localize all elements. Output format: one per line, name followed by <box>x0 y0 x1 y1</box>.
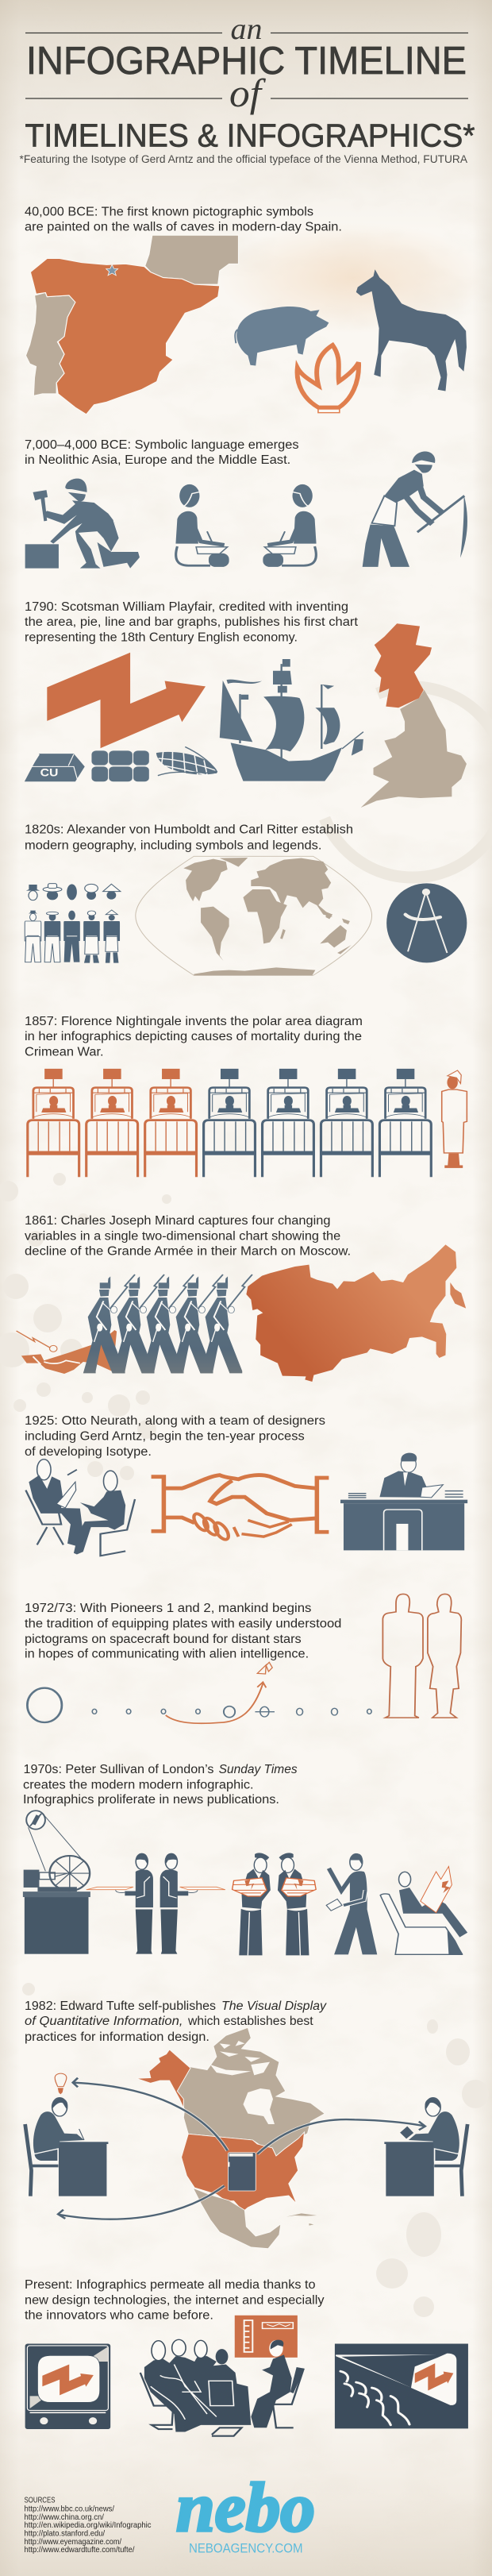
icon: reader at desk <box>384 2098 467 2196</box>
map: North America <box>136 2027 325 2249</box>
icon: wool bale <box>91 750 149 781</box>
icon: light bulb <box>55 2073 67 2094</box>
subtitle: *Featuring the Isotype of Gerd Arntz and the official typeface of the Vienna Method, FUTURA <box>19 153 467 165</box>
icon: printing press <box>23 1811 90 1954</box>
icon: flame <box>298 345 359 413</box>
text: 1790: 1790: Scotsman William Playfair, credited with inventing <box>25 600 348 614</box>
icon: reader in armchair <box>380 1866 467 1954</box>
icon: copper ingot: CU <box>40 768 58 779</box>
arrow: Pioneer trajectory <box>166 1682 266 1723</box>
text: 1861: 1861: Charles Joseph Minard captures four changing <box>25 1214 331 1228</box>
sources: http://www.china.org.cn/ <box>24 2512 104 2522</box>
icon: reaper <box>363 451 467 567</box>
neolithic figures <box>25 451 467 569</box>
hospital beds <box>28 1069 467 1177</box>
icon: television <box>25 2344 110 2429</box>
text: 1970s: Infographics proliferate in news publications. <box>23 1793 279 1807</box>
icon: standing man with note <box>326 1853 377 1954</box>
text: 1970s <box>23 1763 298 1807</box>
icon: marching soldiers <box>83 1275 252 1373</box>
title <box>25 13 475 154</box>
icon: sun and planets <box>27 1688 371 1722</box>
text: 1820s <box>25 823 353 852</box>
text: 1982: which establishes best <box>187 2015 313 2028</box>
icon: paper carriers <box>233 1853 316 1955</box>
icon: projector screening <box>335 2344 468 2428</box>
icon: pig <box>235 307 329 365</box>
text: 40,000 BCE: 40,000 BCE: The first known pictographic symbols <box>25 205 313 218</box>
text: 1861 <box>25 1214 351 1259</box>
40,000 BCE illustrations <box>25 235 467 415</box>
icon: copper ingot <box>25 754 85 781</box>
icon: press workers <box>116 1853 198 1954</box>
sources: http://en.wikipedia.org/wiki/Infographic <box>24 2520 151 2530</box>
text: 1857: in her infographics depicting causes of mortality during the <box>25 1030 362 1043</box>
1861 illustrations <box>17 1244 466 1382</box>
icon: spacecraft <box>257 1662 272 1674</box>
text: 1925: including Gerd Arntz, begin the ten-year process <box>25 1429 305 1444</box>
icon: compass <box>386 883 467 962</box>
text: Present: the innovators who came before. <box>25 2309 213 2323</box>
figure: man <box>382 1594 423 1718</box>
text: 1790 <box>25 600 359 645</box>
text: 1972/73: pictograms on spacecraft bound for distant stars <box>25 1633 302 1646</box>
icon: scribes <box>175 484 317 567</box>
text: 1972/73: in hopes of communicating with alien intelligence. <box>25 1648 309 1661</box>
text: 1970s: 1970s: Peter Sullivan of London’s <box>24 1763 214 1776</box>
text: 1982: of Quantitative Information, <box>25 2015 183 2028</box>
text: 1925 <box>25 1414 325 1459</box>
Pioneer plaque human figures <box>382 1594 461 1718</box>
map: world <box>136 856 372 975</box>
map: Russia <box>246 1244 466 1382</box>
text: 1925: 1925: Otto Neurath, along with a team of designers <box>25 1414 325 1428</box>
text: 1790: representing the 18th Century English economy. <box>25 631 298 645</box>
text: 1861: decline of the Grande Armée in their March on Moscow. <box>25 1245 351 1259</box>
Present illustrations <box>25 2316 468 2436</box>
1970s illustrations <box>23 1811 467 1955</box>
icon: fallen soldier <box>17 1330 117 1374</box>
sources: http://plato.stanford.edu/ <box>24 2529 105 2539</box>
text: 1861: variables in a single two-dimensional chart showing the <box>25 1229 340 1244</box>
text: 1790: the area, pie, line and bar graphs, publishes his first chart <box>25 615 359 629</box>
icon: writer at desk <box>25 2098 108 2196</box>
1925 illustrations <box>25 1453 467 1556</box>
arrows from book <box>58 2078 425 2219</box>
title: TIMELINES & INFOGRAPHICS* <box>25 118 475 154</box>
title: of <box>229 71 266 115</box>
icon: horse <box>356 269 467 391</box>
icon: handshake <box>152 1475 329 1541</box>
text: 1970s: Sunday Times <box>219 1763 298 1776</box>
icon: meeting around chart <box>140 2316 305 2436</box>
text: 40,000 BCE <box>25 205 342 233</box>
text: 1982: 1982: Edward Tufte self-publishes <box>25 1999 216 2013</box>
legend: hats and people <box>25 884 121 963</box>
text: 1857: 1857: Florence Nightingale invents the polar area diagram <box>25 1015 363 1028</box>
icon: ship <box>220 659 363 781</box>
text: Present: Present: Infographics permeate all media thanks to <box>25 2278 316 2292</box>
logo: nebo: nebo <box>176 2470 315 2547</box>
text: 7,000-4,000 BCE <box>25 438 299 467</box>
map: United Kingdom <box>361 623 467 808</box>
text: 1970s: creates the modern modern infographic. <box>23 1778 254 1791</box>
text: 1925: of developing Isotype. <box>25 1445 152 1459</box>
icon: man at desk <box>340 1453 467 1550</box>
text: 1982: The Visual Display <box>221 1999 327 2013</box>
text: Present: new design technologies, the internet and especially <box>25 2293 325 2308</box>
icon: nurse <box>442 1070 467 1168</box>
beds: orange <box>28 1069 197 1177</box>
sources: SOURCES <box>24 2496 56 2505</box>
beds: blue <box>204 1069 431 1177</box>
text: 1857 <box>25 1015 363 1059</box>
sources: http://www.bbc.co.uk/news/ <box>24 2504 114 2513</box>
figure: woman <box>428 1594 461 1718</box>
sources: http://www.edwardtufte.com/tufte/ <box>24 2545 135 2555</box>
title: an <box>230 13 262 46</box>
text: 1982 <box>25 1999 327 2044</box>
text: 1972/73 <box>25 1602 341 1661</box>
text: 1820s: modern geography, including symbols and legends. <box>25 839 321 852</box>
1982 illustrations <box>25 2027 467 2249</box>
text: 1820s: 1820s: Alexander von Humboldt and Carl Ritter establish <box>25 823 353 837</box>
sources: http://www.eyemagazine.com/ <box>24 2537 121 2547</box>
map: Iberia and France <box>25 235 239 415</box>
chart: Playfair zigzag arrow <box>47 653 206 748</box>
logo url: NEBOAGENCY.COM <box>189 2541 303 2555</box>
1820s illustrations <box>25 856 467 975</box>
1790 illustrations <box>25 623 467 808</box>
icon: seated men <box>25 1460 135 1556</box>
sources <box>24 2496 151 2555</box>
text: 1857: Crimean War. <box>25 1046 104 1059</box>
title: INFOGRAPHIC TIMELINE <box>26 40 467 83</box>
text: 1972/73: 1972/73: With Pioneers 1 and 2, mankind begins <box>25 1602 312 1615</box>
text: Present <box>25 2278 325 2323</box>
text: 40,000 BCE: are painted on the walls of caves in modern-day Spain. <box>25 220 342 233</box>
text: 1972/73: the tradition of equipping plates with easily understood <box>25 1617 341 1631</box>
icon: stonemason <box>25 479 140 569</box>
text: 7,000-4,000 BCE: 7,000–4,000 BCE: Symbolic language emerges <box>25 438 299 452</box>
icon: sheets of paper <box>86 1887 225 1890</box>
Pioneer plaque solar system <box>27 1662 371 1723</box>
text: 1982: practices for information design. <box>25 2030 209 2044</box>
text: 7,000-4,000 BCE: in Neolithic Asia, Europe and the Middle East. <box>25 453 290 467</box>
icon: book <box>228 2153 256 2191</box>
icon: corn <box>156 747 217 776</box>
icon: cave star <box>106 264 118 276</box>
